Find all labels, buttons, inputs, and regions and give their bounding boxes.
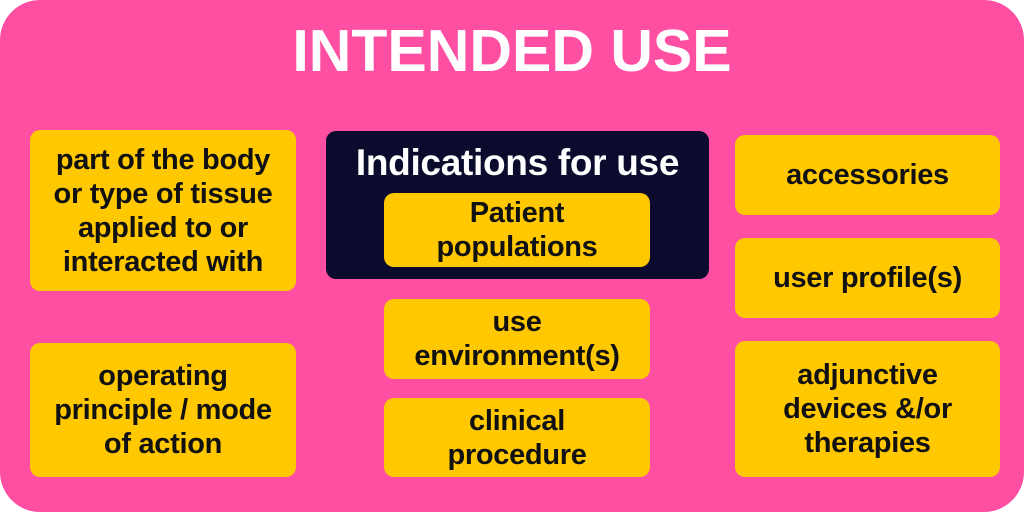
box: body part: applied to or (78, 212, 248, 244)
box: patient populations (384, 193, 650, 267)
box: adjunctive devices: therapies (804, 427, 931, 459)
box: patient populations: populations (436, 231, 598, 263)
box: accessories (735, 135, 1000, 215)
box: operating principle: of action (104, 428, 222, 460)
box: adjunctive devices: devices &/or (783, 393, 952, 425)
heading: indications: Indications for use (356, 142, 679, 183)
box: body part: part of the body (56, 144, 270, 176)
panel: indications for use (326, 131, 709, 279)
box: clinical procedure (384, 398, 650, 477)
box: adjunctive devices (735, 341, 1000, 477)
box: clinical procedure: procedure (447, 438, 587, 470)
box: operating principle (30, 343, 296, 477)
box: body part: interacted with (63, 246, 263, 278)
box: operating principle: principle / mode (54, 394, 272, 426)
box: use environment: use (492, 306, 542, 338)
box: adjunctive devices: adjunctive (797, 359, 938, 391)
box: operating principle: operating (98, 360, 228, 392)
box: use environment: environment(s) (414, 340, 620, 372)
box: body part (30, 130, 296, 291)
title: INTENDED USE (292, 18, 732, 84)
box: accessories: accessories (786, 159, 949, 191)
box: user profiles: user profile(s) (773, 262, 962, 294)
box: use environment (384, 299, 650, 379)
box: patient populations: Patient (470, 197, 564, 229)
box: body part: or type of tissue (54, 178, 272, 210)
box: user profiles (735, 238, 1000, 318)
box: clinical procedure: clinical (469, 404, 565, 436)
